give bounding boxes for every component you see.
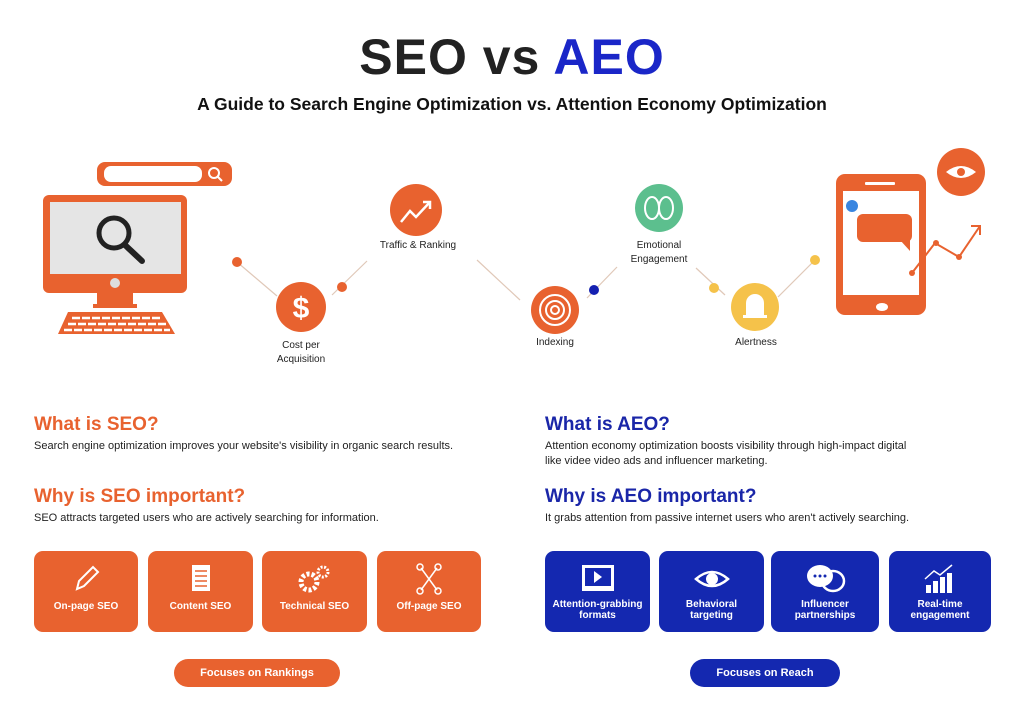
text: what is AEO: Attention economy optimization boosts visibility through high-impact digital	[545, 440, 906, 452]
icon: computer	[43, 195, 187, 334]
card: on-page SEO	[34, 551, 138, 632]
card: real-time engagement	[889, 551, 991, 632]
card: content SEO	[148, 551, 253, 632]
text: what is SEO: Search engine optimization improves your website's visibility in organic search results.	[34, 440, 453, 452]
card: influencer partnerships	[771, 551, 879, 632]
card: technical SEO: Technical SEO	[280, 601, 349, 612]
labels: Acquisition	[277, 354, 325, 365]
pill: focuses on rankings: Focuses on Rankings	[200, 667, 314, 679]
text: why SEO important: SEO attracts targeted users who are actively searching for information.	[34, 512, 379, 524]
card: real-time engagement: engagement	[911, 610, 969, 621]
card: influencer partnerships: Influencer	[801, 599, 849, 610]
text: why AEO important: It grabs attention from passive internet users who aren't actively searching.	[545, 512, 909, 524]
labels: Cost per	[282, 340, 321, 351]
card: on-page SEO: On-page SEO	[54, 601, 118, 612]
text: what is AEO: What is AEO?	[545, 414, 670, 435]
text: why AEO important	[545, 486, 909, 524]
subtitle: A Guide to Search Engine Optimization vs. Attention Economy Optimization	[197, 94, 827, 114]
text: what is SEO: What is SEO?	[34, 414, 159, 435]
labels: Indexing	[536, 337, 574, 348]
text: why SEO important: Why is SEO important?	[34, 486, 245, 507]
text: what is AEO: like videe video ads and influencer marketing.	[545, 455, 768, 467]
card: influencer partnerships: partnerships	[795, 610, 855, 621]
card: attention-grabbing formats: Attention-grabbing	[552, 599, 642, 610]
icon: dollar: $	[293, 292, 310, 325]
text: why AEO important: Why is AEO important?	[545, 486, 756, 507]
card: off-page SEO: Off-page SEO	[396, 601, 462, 612]
text: what is AEO	[545, 414, 906, 467]
card: technical SEO	[262, 551, 367, 632]
top illustration	[43, 148, 985, 365]
labels: Emotional	[637, 240, 681, 251]
text: why SEO important	[34, 486, 379, 524]
card: behavioral targeting: targeting	[690, 610, 733, 621]
icon: eye	[937, 148, 985, 196]
connector lines	[237, 260, 815, 300]
card: behavioral targeting: Behavioral	[686, 599, 737, 610]
text: what is SEO	[34, 414, 453, 452]
card: behavioral targeting	[659, 551, 764, 632]
card: attention-grabbing formats: formats	[579, 610, 616, 621]
icon: brain	[635, 184, 683, 232]
pill: focuses on reach	[690, 659, 840, 687]
icon: search bar	[97, 162, 232, 186]
card: attention-grabbing formats	[545, 551, 650, 632]
icon: target	[531, 286, 579, 334]
card: off-page SEO	[377, 551, 481, 632]
card: real-time engagement: Real-time	[917, 599, 962, 610]
labels: Engagement	[631, 254, 688, 265]
pill: focuses on reach: Focuses on Reach	[716, 667, 814, 679]
labels	[277, 240, 777, 365]
icon: trend	[390, 184, 442, 236]
title: SEO vs AEO	[359, 29, 665, 85]
card: content SEO: Content SEO	[170, 601, 231, 612]
icon: bell	[731, 283, 779, 331]
icon: dollar	[276, 282, 326, 332]
pill: focuses on rankings	[174, 659, 340, 687]
labels: Alertness	[735, 337, 777, 348]
labels: Traffic & Ranking	[380, 240, 456, 251]
icon: phone	[836, 174, 980, 315]
